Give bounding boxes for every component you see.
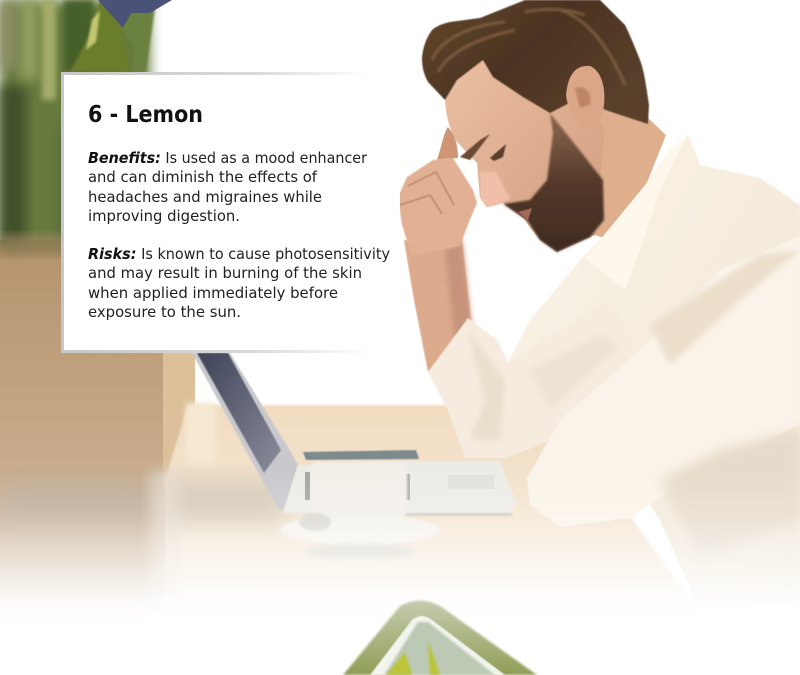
- risks text block: when applied immediately before: [88, 284, 338, 302]
- face: [445, 50, 605, 252]
- green glass plate: [343, 600, 537, 675]
- nose highlight: [480, 172, 510, 207]
- spoon: [299, 513, 331, 531]
- benefits text block: Benefits: Is used as a mood enhancer: [88, 149, 368, 167]
- eye: [490, 144, 506, 161]
- mouth: [518, 208, 532, 220]
- shirt back and body: [508, 135, 800, 610]
- heading: 6 - Lemon: [88, 102, 203, 128]
- benefits text block: and can diminish the effects of: [88, 168, 318, 186]
- saucer: [280, 515, 440, 545]
- neck: [550, 100, 666, 238]
- ear: [566, 66, 604, 130]
- wood cabinet at left: [0, 240, 195, 640]
- table shadow: [0, 480, 285, 525]
- bottom white fade: [0, 470, 800, 675]
- hand: [398, 158, 477, 256]
- soft edge between cabinet and table: [150, 470, 180, 640]
- collar: [585, 135, 688, 290]
- sleeve cuff and upper arm: [428, 300, 650, 458]
- table top: [0, 403, 720, 640]
- laptop base: [283, 461, 516, 513]
- hair highlights: [432, 9, 625, 85]
- plant foliage: [0, 0, 160, 254]
- laptop screen: [192, 353, 298, 512]
- index finger: [437, 127, 458, 160]
- risks text block: [88, 245, 390, 321]
- brow: [460, 134, 490, 160]
- risks text block: and may result in burning of the skin: [88, 264, 362, 282]
- laptop: [192, 353, 516, 559]
- risks text block: Risks: Is known to cause photosensitivity: [88, 245, 390, 263]
- beard: [503, 113, 604, 252]
- icon: navy triangle at top: [98, 0, 172, 28]
- phone on table: [303, 450, 419, 460]
- benefits text block: improving digestion.: [88, 207, 240, 225]
- benefits text block: headaches and migraines while: [88, 188, 322, 206]
- forearm resting on table: [527, 236, 800, 527]
- benefits text block: [88, 149, 368, 225]
- finger creases: [400, 172, 454, 214]
- man: [398, 0, 800, 610]
- coffee cup: [311, 462, 407, 517]
- shirt shading: [650, 250, 800, 365]
- forearm: [404, 240, 472, 372]
- hair: [422, 0, 649, 124]
- risks text block: exposure to the sun.: [88, 303, 241, 321]
- panel background: [64, 75, 400, 350]
